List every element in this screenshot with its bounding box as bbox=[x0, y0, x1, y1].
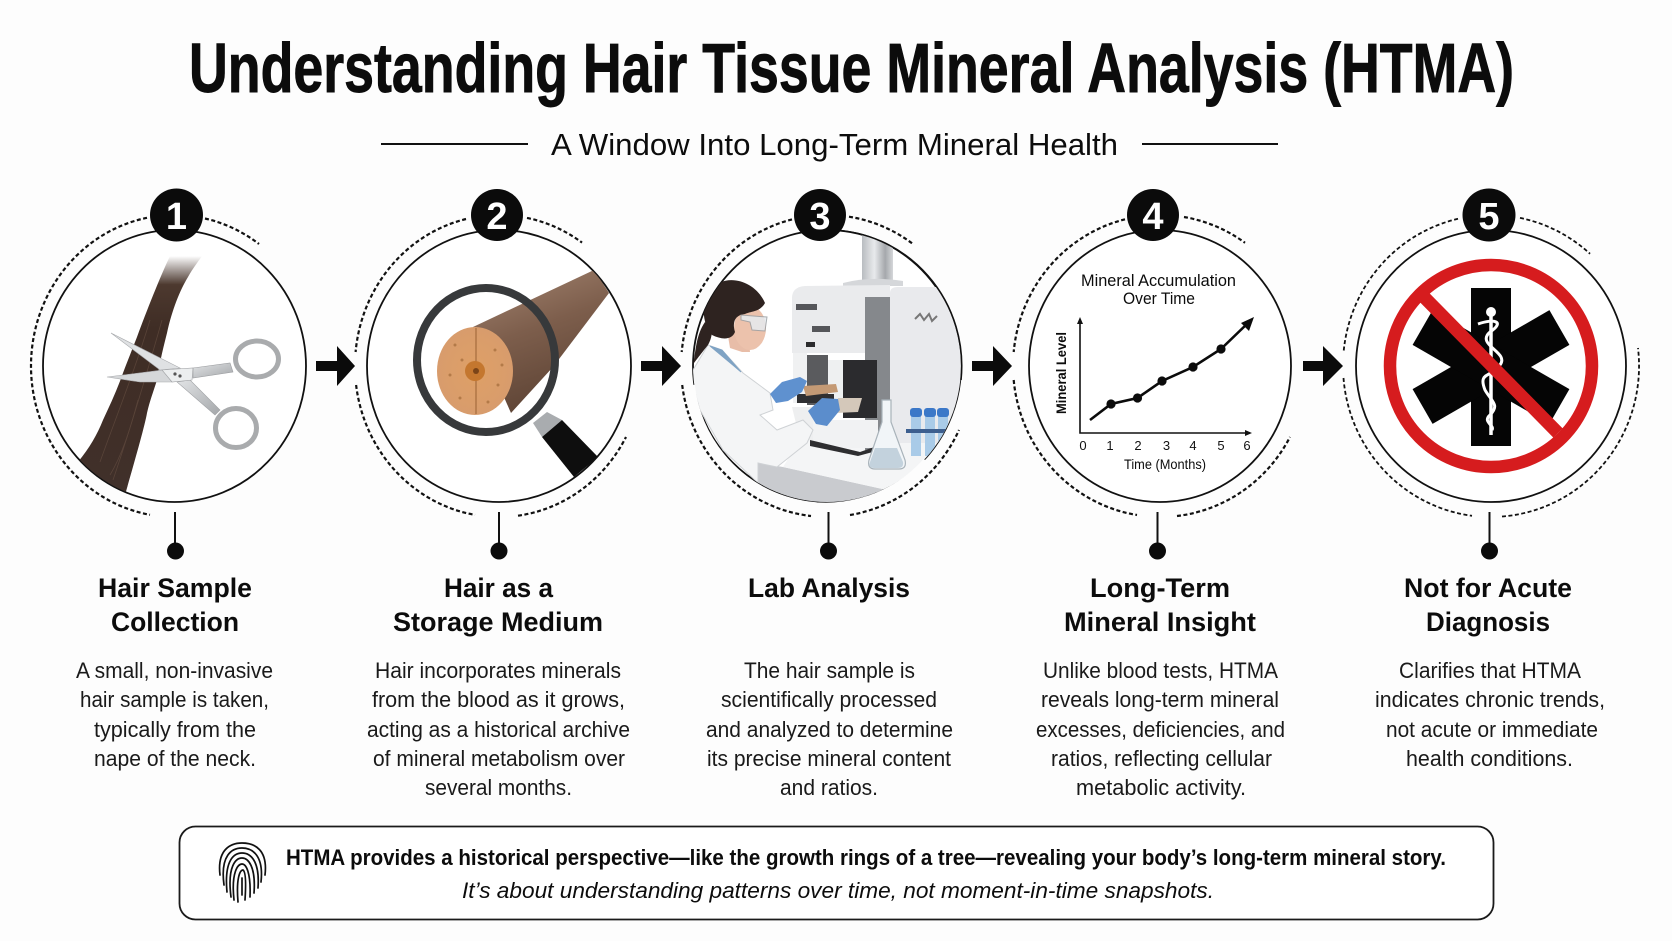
text block 4: Unlike blood tests, HTMA bbox=[1043, 658, 1278, 683]
step number badge 4 bbox=[1127, 189, 1179, 241]
chart: mineral accumulation over time: 4 bbox=[1189, 438, 1197, 453]
text block 1: hair sample is taken, bbox=[80, 687, 269, 712]
subtitle: A Window Into Long-Term Mineral Health bbox=[551, 127, 1118, 162]
text block 2: from the blood as it grows, bbox=[372, 687, 625, 712]
panel: step 3 lab analysis bbox=[682, 189, 965, 800]
heading 4 bbox=[1064, 573, 1256, 637]
text block 1: typically from the bbox=[94, 717, 256, 742]
heading 1 bbox=[98, 573, 252, 637]
step number badge 3: 3 bbox=[809, 196, 831, 238]
chart: mineral accumulation over time: 0 bbox=[1079, 438, 1087, 453]
text block 4: metabolic activity. bbox=[1076, 775, 1246, 800]
illustration: scientist at analyzer bbox=[690, 225, 965, 510]
heading 1: Collection bbox=[111, 607, 239, 637]
arrow 1 to 2 bbox=[316, 346, 355, 386]
arrow 2 to 3 bbox=[641, 346, 681, 386]
text block 2: of mineral metabolism over bbox=[373, 746, 625, 771]
chart: mineral accumulation over time: Time (Months) bbox=[1124, 456, 1206, 472]
chart: mineral accumulation over time bbox=[1053, 272, 1254, 472]
connector 3 bbox=[820, 512, 837, 560]
step number badge 5 bbox=[1462, 188, 1516, 242]
callout text: HTMA provides a historical perspective—like the growth rings of a tree—revealing your body’s long-term mineral story. bbox=[286, 845, 1446, 870]
text block 4: reveals long-term mineral bbox=[1041, 687, 1279, 712]
connector 5 bbox=[1481, 512, 1498, 560]
text block 3: The hair sample is bbox=[744, 658, 915, 683]
step number badge 2 bbox=[471, 189, 523, 241]
chart: mineral accumulation over time: Over Time bbox=[1123, 290, 1195, 308]
text block 2: several months. bbox=[425, 775, 572, 800]
chart: mineral accumulation over time: Mineral Accumulation bbox=[1081, 272, 1236, 290]
text block 5: Clarifies that HTMA bbox=[1399, 658, 1581, 683]
connector 4 bbox=[1149, 512, 1166, 560]
callout text: It’s about understanding patterns over time, not moment-in-time snapshots. bbox=[462, 878, 1214, 903]
panel: step 5 not for acute diagnosis bbox=[1344, 188, 1639, 771]
heading 5: Diagnosis bbox=[1426, 607, 1550, 637]
text block 3: and ratios. bbox=[780, 775, 878, 800]
chart: mineral accumulation over time: 5 bbox=[1217, 438, 1225, 453]
chart: mineral accumulation over time: 1 bbox=[1106, 438, 1114, 453]
step number badge 4: 4 bbox=[1142, 196, 1164, 238]
text block 3 bbox=[706, 658, 953, 800]
icon: magnified hair cross-section bbox=[417, 270, 609, 477]
step number badge 3 bbox=[794, 189, 846, 241]
step number badge 1: 1 bbox=[166, 196, 187, 238]
heading 2 bbox=[393, 573, 603, 637]
text block 5: health conditions. bbox=[1406, 746, 1573, 771]
heading 5 bbox=[1404, 573, 1572, 637]
text block 1: nape of the neck. bbox=[94, 746, 256, 771]
heading 4: Long-Term bbox=[1090, 573, 1230, 603]
text block 5: indicates chronic trends, bbox=[1375, 687, 1605, 712]
text block 2: acting as a historical archive bbox=[367, 717, 630, 742]
text block 3: its precise mineral content bbox=[707, 746, 951, 771]
panel: step 4 long-term mineral insight bbox=[1014, 189, 1291, 800]
step number badge 2: 2 bbox=[486, 196, 508, 238]
ring edge over illustration bbox=[693, 230, 962, 504]
callout text bbox=[286, 845, 1446, 903]
text block 3: and analyzed to determine bbox=[706, 717, 953, 742]
heading 3: Lab Analysis bbox=[748, 573, 910, 603]
heading 4: Mineral Insight bbox=[1064, 607, 1256, 637]
heading 2: Hair as a bbox=[444, 573, 554, 603]
text block 1 bbox=[76, 658, 273, 771]
chart: mineral accumulation over time: Mineral Level bbox=[1053, 332, 1069, 414]
step number badge 1 bbox=[150, 188, 203, 242]
text block 5: not acute or immediate bbox=[1386, 717, 1598, 742]
panel: step 1 hair sample collection bbox=[31, 188, 306, 771]
icon: fingerprint bbox=[220, 843, 265, 902]
text block 2: Hair incorporates minerals bbox=[375, 658, 621, 683]
heading 2: Storage Medium bbox=[393, 607, 603, 637]
connector 2 bbox=[490, 512, 508, 560]
text block 2 bbox=[367, 658, 630, 800]
text block 3: scientifically processed bbox=[721, 687, 937, 712]
heading 5: Not for Acute bbox=[1404, 573, 1572, 603]
callout box bbox=[180, 826, 1494, 920]
text block 4: ratios, reflecting cellular bbox=[1051, 746, 1272, 771]
text block 4 bbox=[1036, 658, 1285, 800]
arrow 3 to 4 bbox=[972, 346, 1012, 386]
panel: step 2 hair as storage medium bbox=[356, 189, 631, 800]
icon: crossed-out medical star of life bbox=[1390, 265, 1592, 467]
chart: mineral accumulation over time: 6 bbox=[1243, 438, 1251, 453]
heading 1: Hair Sample bbox=[98, 573, 252, 603]
arrow 4 to 5 bbox=[1303, 346, 1343, 386]
chart: mineral accumulation over time: 3 bbox=[1163, 438, 1170, 453]
text block 5 bbox=[1375, 658, 1605, 771]
step number badge 5: 5 bbox=[1478, 196, 1500, 238]
icon: hair strand and scissors bbox=[78, 256, 278, 495]
chart: mineral accumulation over time: 2 bbox=[1134, 438, 1142, 453]
connector 1 bbox=[167, 512, 184, 560]
text block 4: excesses, deficiencies, and bbox=[1036, 717, 1285, 742]
text block 1: A small, non-invasive bbox=[76, 658, 273, 683]
